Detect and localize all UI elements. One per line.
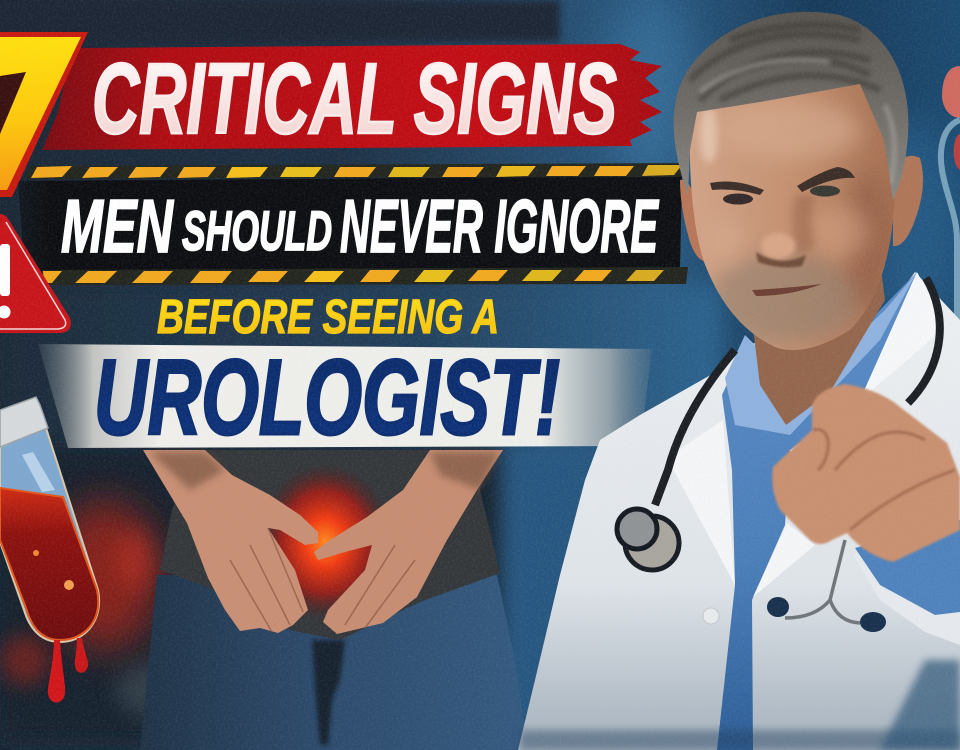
groin glow <box>257 464 393 620</box>
right lapel <box>753 523 815 597</box>
jeans <box>140 575 528 750</box>
left lapel <box>667 420 735 585</box>
hand shading <box>813 430 955 530</box>
banner: red title <box>42 44 662 150</box>
warning triangle <box>0 214 71 333</box>
number 7 badge <box>0 32 88 197</box>
face <box>690 70 895 350</box>
hair <box>674 12 908 200</box>
heading: critical signs: CRITICAL SIGNS <box>92 43 617 155</box>
heading: before seeing a: BEFORE SEEING A <box>157 291 499 344</box>
banner: black text band <box>18 176 682 276</box>
eyebrows <box>710 182 764 195</box>
left arm and hand <box>143 450 318 633</box>
hazard stripe top <box>26 163 686 179</box>
heading: men should never ignore: NEVER IGNORE <box>340 184 659 268</box>
background organ illustration <box>941 66 960 320</box>
lab coat <box>518 272 960 750</box>
finger lines <box>230 528 415 632</box>
white urologist banner <box>38 344 652 448</box>
eyes <box>723 194 753 204</box>
right coat collar <box>860 272 945 400</box>
face shading <box>700 100 890 343</box>
doctor <box>518 0 960 750</box>
ears <box>893 156 923 246</box>
shirt <box>717 272 917 750</box>
stethoscope tube right <box>908 278 940 403</box>
pointing hand <box>772 384 960 562</box>
t-shirt <box>160 450 500 640</box>
heading: men should never ignore: MEN <box>61 184 174 268</box>
mouth <box>752 284 822 296</box>
collar <box>725 272 917 435</box>
stethoscope metal tubes <box>785 540 860 623</box>
seven notch <box>0 72 26 134</box>
coat button <box>703 608 719 624</box>
arm shadow <box>150 452 500 490</box>
stethoscope earpieces <box>767 597 789 617</box>
blood drips <box>48 640 65 703</box>
crotch shadow <box>312 640 345 745</box>
heading: urologist: UROLOGIST! <box>94 337 560 457</box>
test tube with blood <box>0 397 99 703</box>
man with hands on groin <box>140 450 528 750</box>
right arm and hand <box>314 450 503 634</box>
stethoscope chest piece <box>617 509 679 570</box>
neck <box>752 260 885 425</box>
coat sleeve <box>853 525 960 645</box>
coat fade at bottom <box>520 660 960 750</box>
stethoscope tube left <box>655 350 735 505</box>
heading: men should never ignore: SHOULD <box>182 199 332 262</box>
hazard stripe bottom <box>38 267 688 285</box>
heading: men should never ignore <box>61 184 659 268</box>
shirt cuff <box>855 520 960 615</box>
